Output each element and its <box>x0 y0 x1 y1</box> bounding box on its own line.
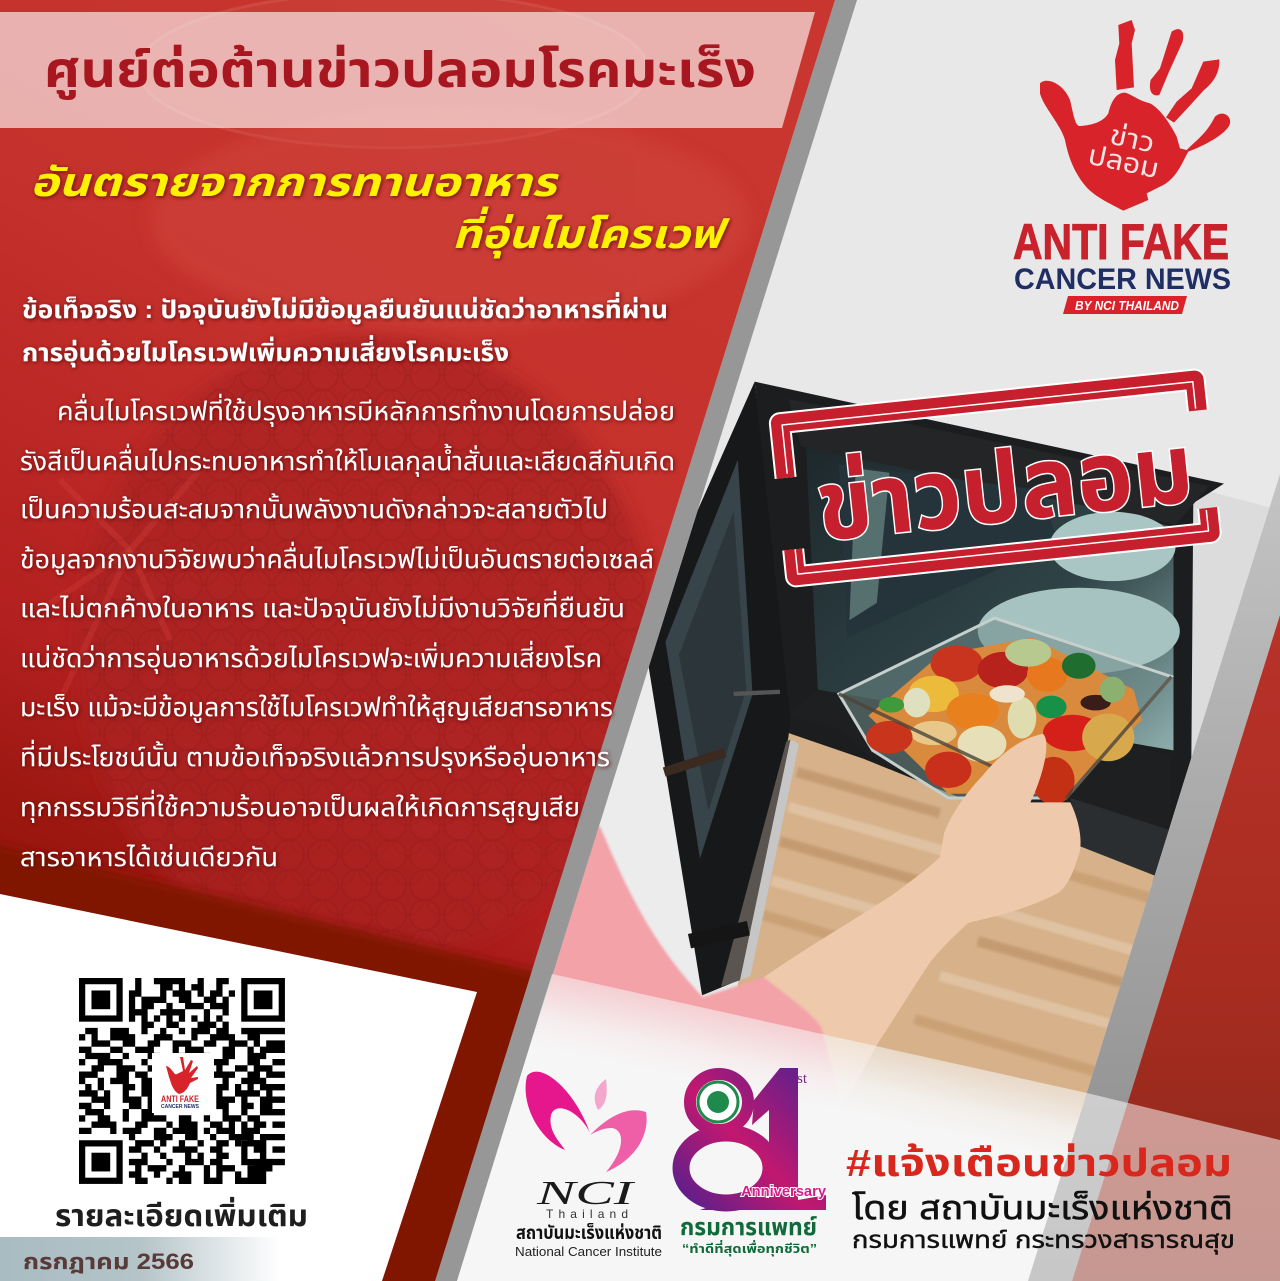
logo: National Cancer Institute <box>515 1072 662 1259</box>
thai name: สถาบันมะเร็งแห่งชาติ <box>516 1221 662 1244</box>
body text <box>20 393 675 872</box>
fact summary <box>22 292 668 368</box>
panel: right red shape <box>1072 615 1280 1281</box>
body text: เป็นความร้อนสะสมจากนั้นพลังงานดังกล่าวจะสลายตัวไป <box>20 492 608 524</box>
icon: anti fake news logo: BY NCI THAILAND <box>1075 298 1180 313</box>
number 1 <box>700 1068 826 1210</box>
door latches <box>664 752 725 772</box>
department name: กรมการแพทย์ <box>680 1214 817 1241</box>
QR finder patterns <box>82 981 282 1181</box>
wall beside door <box>494 633 704 1011</box>
by nci thailand <box>1063 296 1187 314</box>
hand and arm <box>764 734 1081 1068</box>
anniversary: Anniversary <box>741 1183 827 1200</box>
QR modules <box>79 981 285 1181</box>
cancer news: CANCER NEWS <box>1014 263 1231 296</box>
department seal <box>698 1082 738 1122</box>
QR caption: รายละเอียดเพิ่มเติม <box>55 1196 308 1233</box>
QR center logo <box>152 1053 214 1113</box>
anti fake: ANTI FAKE <box>1013 214 1229 270</box>
yellow headline: ที่อุ่นไมโครเวฟ <box>452 206 730 259</box>
number 8 <box>681 1074 771 1203</box>
st: st <box>797 1071 808 1087</box>
QR center logo: ANTI FAKE <box>161 1094 199 1104</box>
background blood cell <box>138 0 648 148</box>
gray stripe right <box>1028 474 1280 1281</box>
fact summary: ข้อเท็จจริง : ปัจจุบันยังไม่มีข้อมูลยืนยันแน่ชัดว่าอาหารที่ผ่าน <box>22 292 668 325</box>
body text: และไม่ตกค้างในอาหาร และปัจจุบันยังไม่มีงานวิจัยที่ยืนยัน <box>20 590 625 624</box>
body text: ที่มีประโยชน์นั้น ตามข้อเท็จจริงแล้วการปรุงหรืออุ่นอาหาร <box>20 739 610 773</box>
body text: ทุกกรรมวิธีที่ใช้ความร้อนอาจเป็นผลให้เกิดการสูญเสีย <box>20 789 580 823</box>
icon: red hand: ปลอม <box>1085 139 1162 184</box>
english name: National Cancer Institute <box>515 1245 662 1259</box>
food <box>839 638 1171 805</box>
department slogan: “ทำดีที่สุดเพื่อทุกชีวิต” <box>682 1240 817 1256</box>
microwave white body <box>1192 492 1270 756</box>
icon: red hand <box>1040 20 1230 211</box>
hashtag: #แจ้งเตือนข่าวปลอม <box>846 1143 1232 1185</box>
butterfly icon <box>526 1072 647 1172</box>
oven door <box>643 382 790 995</box>
wood stripes <box>763 772 1180 1080</box>
photo: microwave oven with hand taking out a dish <box>494 382 1280 1281</box>
ministry line: กรมการแพทย์ กระทรวงสาธารณสุข <box>852 1227 1235 1255</box>
translucent overlay over right red and stripe <box>1028 1093 1280 1281</box>
date bar <box>0 1237 280 1281</box>
title band <box>0 12 815 128</box>
pink sleeve <box>540 825 829 1066</box>
body text: มะเร็ง แม้จะมีข้อมูลการใช้ไมโครเวฟทำให้สูญเสียสารอาหาร <box>20 692 613 723</box>
body text: ข้อมูลจากงานวิจัยพบว่าคลื่นไมโครเวฟไม่เป็นอันตรายต่อเซลล์ <box>20 541 654 575</box>
QR center logo: CANCER NEWS <box>161 1104 200 1110</box>
fact summary: การอุ่นด้วยไมโครเวฟเพิ่มความเสี่ยงโรคมะเร็ง <box>22 335 509 368</box>
body text: รังสีเป็นคลื่นไปกระทบอาหารทำให้โมเลกุลน้ำสั่นและเสียดสีกันเกิด <box>20 443 675 477</box>
dark lower band <box>0 840 560 1281</box>
body text: คลื่นไมโครเวฟที่ใช้ปรุงอาหารมีหลักการทำงานโดยการปล่อย <box>57 393 675 427</box>
panel: left red background <box>0 0 840 1281</box>
logo: 81st anniversary <box>680 1068 827 1256</box>
turntable <box>978 588 1180 674</box>
panel: lower white fade <box>457 974 1087 1281</box>
yellow headline: อันตรายจากการทานอาหาร <box>30 161 560 205</box>
title: ศูนย์ต่อต้านข่าวปลอมโรคมะเร็ง <box>44 42 756 100</box>
icon: red hand: ข่าว <box>1107 119 1158 159</box>
body text: แน่ชัดว่าการอุ่นอาหารด้วยไมโครเวฟจะเพิ่มความเสี่ยงโรค <box>20 640 602 674</box>
back wall shine <box>839 464 1054 594</box>
QR code <box>79 981 285 1181</box>
stamp word: ข่าวปลอม <box>811 413 1199 561</box>
wood counter <box>738 733 1186 1281</box>
top wall of cavity <box>828 442 1196 506</box>
stamp brackets <box>780 380 1211 576</box>
script mark: NCI <box>535 1175 636 1212</box>
date bar: กรกฎาคม 2566 <box>23 1249 194 1274</box>
body text: สารอาหารได้เช่นเดียวกัน <box>20 842 278 872</box>
panel: white QR box <box>0 894 477 1281</box>
gray stripe left <box>435 0 857 1281</box>
microwave front frame <box>755 382 1224 898</box>
door side edge <box>740 739 799 980</box>
yellow headline <box>30 161 730 259</box>
by institute: โดย สถาบันมะเร็งแห่งชาติ <box>852 1189 1233 1226</box>
lower cavity shadow <box>1152 822 1172 882</box>
tray <box>1070 798 1171 880</box>
glass dish <box>839 618 1171 798</box>
cavity interior <box>805 432 1173 750</box>
door glass <box>665 460 753 859</box>
bright highlight <box>157 129 738 324</box>
icon: anti fake news logo <box>1013 20 1231 314</box>
stamp: fake news <box>780 380 1211 576</box>
background cancer cell <box>77 335 657 965</box>
thailand: Thailand <box>546 1207 628 1221</box>
spiky cell <box>40 470 200 700</box>
